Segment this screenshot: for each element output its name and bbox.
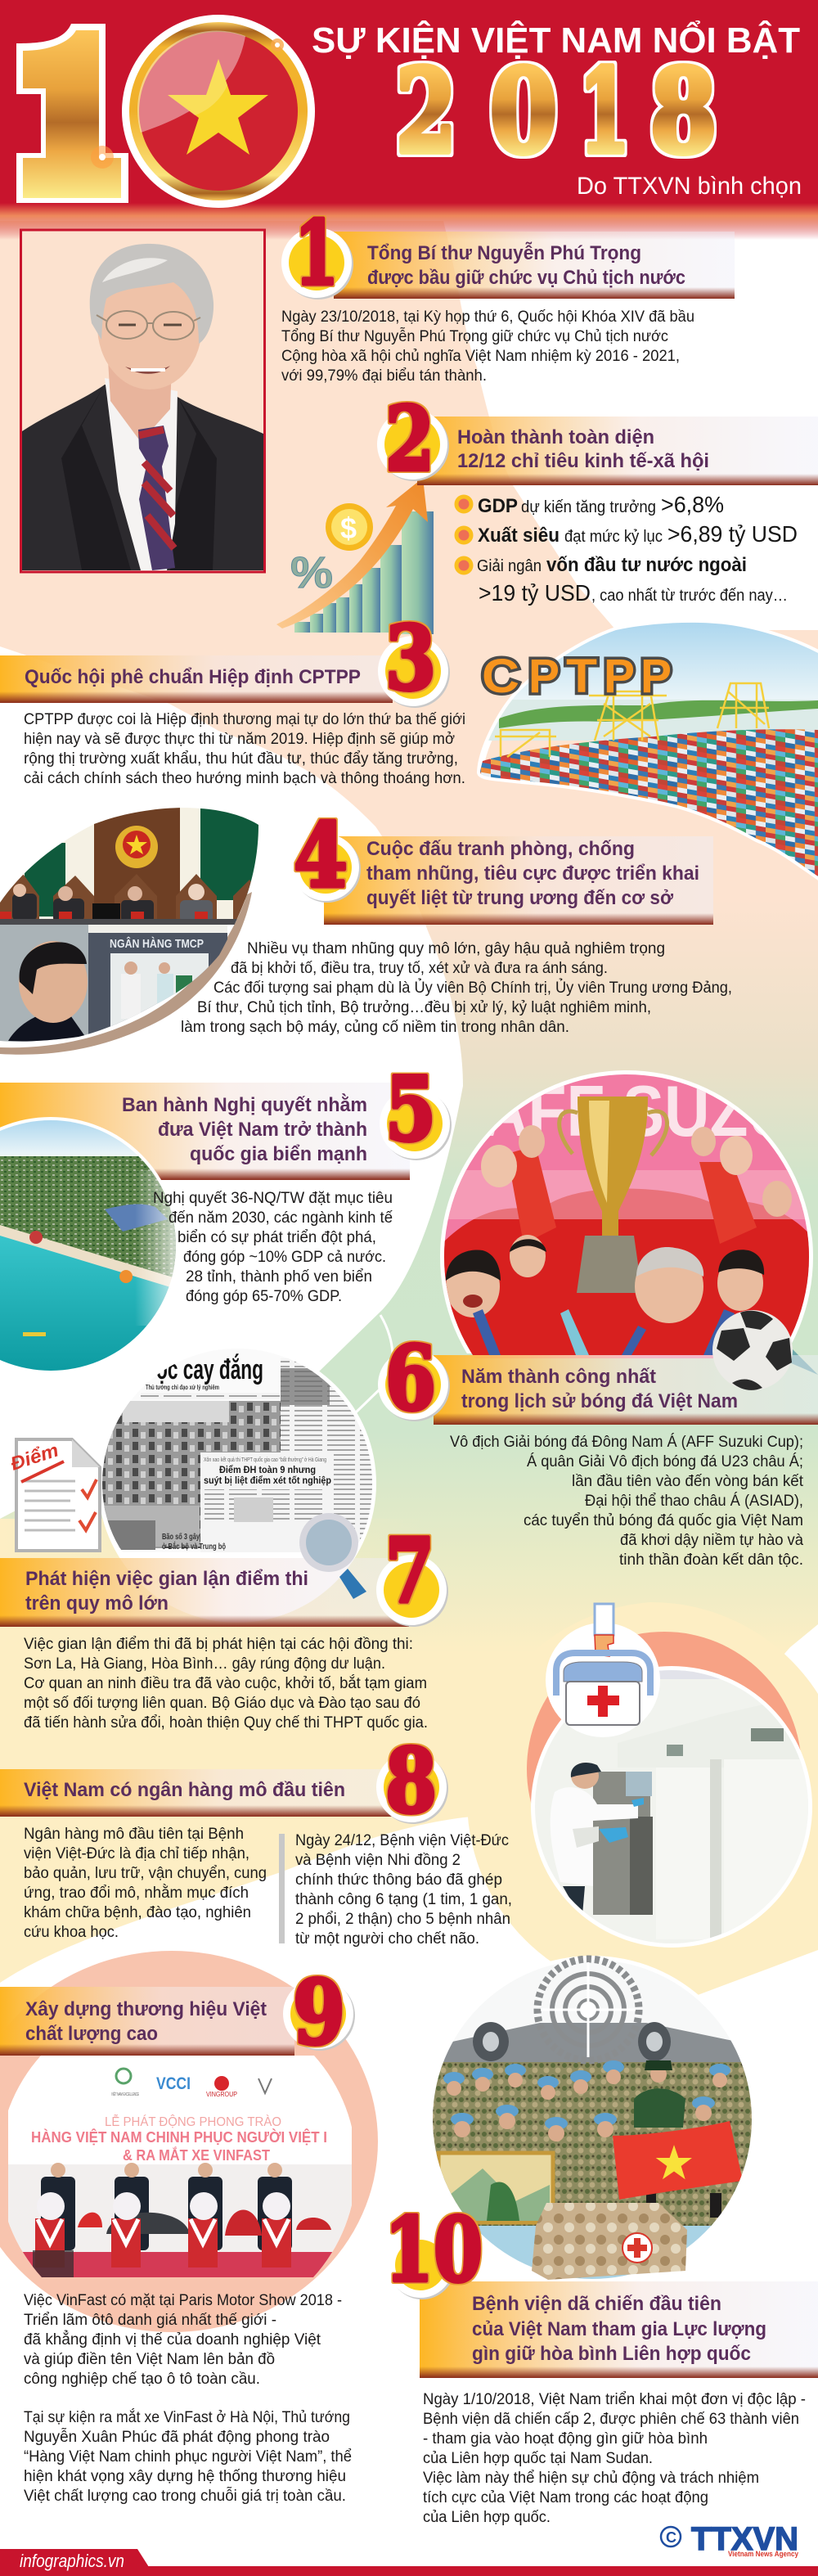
text: event 7: Cơ quan an ninh điều tra đã vào cuộc, khởi tố, bắt tạm giam [24, 1674, 427, 1692]
wordmark: CPTPP: P [640, 650, 672, 703]
text: event 10: - tham gia vào hoạt động gìn giữ hòa bình [423, 2430, 708, 2448]
background: flowing colour band [0, 221, 818, 1983]
bar: event 5 [0, 1083, 410, 1180]
bar: event 10 [420, 2281, 818, 2378]
text: event 6: Đại hội thể thao châu Á (ASIAD), [585, 1493, 803, 1510]
photo: VinFast launch event: & RA MẮT XE VINFAST [123, 2146, 270, 2164]
badge: number 7: 7 [385, 1520, 434, 1623]
text: event 7: Sơn La, Hà Giang, Hòa Bình… gây rúng động dư luận. [24, 1655, 385, 1673]
badge: number 6: 6 [385, 1327, 436, 1430]
text: event 6: các tuyển thủ bóng đá quốc gia Việt Nam [524, 1512, 803, 1529]
badge: number 3: 3 [385, 607, 436, 710]
text: event 6: tinh thần đoàn kết dân tộc. [619, 1551, 803, 1569]
text: event 8 left column: cứu khoa học. [24, 1924, 119, 1941]
text: event 3 [24, 711, 465, 787]
badge: number 4: 4 [294, 804, 348, 907]
text: event 8 right column [295, 1832, 512, 1948]
icon: UN emblem [537, 1959, 639, 2060]
icon: exam score sheet [8, 1439, 100, 1551]
list: economic indicators: GDP [478, 495, 518, 517]
heading: event 5: quốc gia biển mạnh [190, 1143, 367, 1165]
photo: VinFast launch event: VINGROUP [206, 2091, 237, 2098]
heading: event 10: Bệnh viện dã chiến đầu tiên [472, 2293, 721, 2315]
year 2018: 1 [579, 45, 630, 179]
icon: organ transport box [546, 1604, 660, 1737]
heading: event 9: Xây dựng thương hiệu Việt [25, 1998, 267, 2020]
text: event 8 right column: từ một người cho chết não. [295, 1930, 479, 1948]
salmon circle behind tissue bank photo [527, 1632, 802, 1907]
heading: event 5: Ban hành Nghị quyết nhằm [122, 1093, 367, 1116]
divider between columns [279, 1834, 285, 1943]
wordmark: CPTPP: T [566, 650, 597, 703]
list: economic indicators: Xuất siêu [478, 525, 560, 547]
list: economic indicators [456, 492, 798, 606]
text: event 7 [24, 1636, 428, 1732]
text: event 10: của Liên hợp quốc. [423, 2509, 551, 2526]
text: event 8 right column: 2 phổi, 2 thận) cho 5 bệnh nhân [295, 1911, 510, 1928]
bar: event 2 [417, 417, 818, 485]
logo: TTXVN: TTXVN [691, 2521, 798, 2557]
badge: number 2: 2 [385, 388, 434, 491]
text: event 4: Nhiều vụ tham nhũng quy mô lớn, gây hậu quả nghiêm trọng [247, 940, 665, 957]
heading: event 6: Năm thành công nhất [461, 1366, 656, 1388]
icon: exam score sheet: Điểm [8, 1439, 61, 1475]
wordmark: CPTPP: C [482, 650, 519, 703]
text: event 1 [281, 308, 694, 385]
photo: court and trial: NGÂN HÀNG TMCP [110, 936, 204, 951]
photo: coastal resort [0, 1117, 180, 1375]
icon: percent: % [290, 548, 333, 597]
list: economic indicators: >19 tỷ USD [479, 580, 591, 606]
list: economic indicators: >6,8% [661, 492, 724, 517]
text: event 1: Tổng Bí thư Nguyễn Phú Trọng giữ chức vụ Chủ tịch nước [281, 327, 668, 345]
footer strip: infographics.vn [20, 2551, 124, 2571]
text: event 6: đã khơi dậy niềm tự hào và [620, 1532, 803, 1549]
photo: newspaper collage: Xôn xao kết quả thi THPT quốc gia cao “bất thường” ở Hà Giang [204, 1456, 326, 1463]
heading: event 1: Tổng Bí thư Nguyễn Phú Trọng [367, 241, 641, 264]
wordmark: CPTPP [482, 650, 672, 703]
year 2018: 8 [650, 45, 717, 179]
badge: number 9: 9 [293, 1961, 345, 2065]
portrait photo [21, 230, 265, 572]
badge: number 10: 10 [384, 2199, 483, 2302]
text: event 3: CPTPP được coi là Hiệp định thương mại tự do lớn thứ ba thế giới [24, 711, 465, 728]
badge: number 1: 1 [294, 202, 339, 305]
icon: dollar coin: $ [340, 511, 357, 545]
bar: event 6 [434, 1355, 818, 1425]
text: event 9: Nguyễn Xuân Phúc đã phát động phong trào [24, 2428, 330, 2446]
text: event 5: đóng góp 65-70% GDP. [186, 1288, 342, 1305]
heading: event 2 [457, 426, 709, 472]
heading: event 10: gìn giữ hòa bình Liên hợp quốc [472, 2343, 751, 2365]
text: event 9: và giúp điền tên Việt Nam lên bản đồ [24, 2351, 275, 2368]
text: event 4: đã bị khởi tố, điều tra, truy tố, xét xử và đưa ra ánh sáng. [231, 960, 608, 977]
footer strip [0, 2549, 818, 2576]
photo: newspaper collage: Điểm ĐH toàn 9 nhưng [219, 1464, 316, 1475]
text: event 5 [153, 1190, 393, 1305]
heading: event 3: Quốc hội phê chuẩn Hiệp định CPTPP [25, 666, 361, 688]
text: event 1: Cộng hòa xã hội chủ nghĩa Việt Nam nhiệm kỳ 2016 - 2021, [281, 348, 680, 365]
text: event 8 left column: khám chữa bệnh, đào tạo, nghiên [24, 1904, 251, 1921]
heading: event 9: chất lượng cao [25, 2023, 158, 2045]
text: event 5: biển có sự phát triển đột phá, [178, 1229, 376, 1246]
text: event 10: Bệnh viện dã chiến cấp 2, được phiên chế 63 thành viên [423, 2411, 799, 2428]
text: event 7: Việc gian lận điểm thi đã bị phát hiện tại các hội đồng thi: [24, 1636, 413, 1653]
photo: court and trial [0, 806, 262, 1055]
photo: newspaper collage: Thủ tướng chỉ đạo xử lý nghiêm [146, 1384, 219, 1391]
text: event 10: Ngày 1/10/2018, Việt Nam triển khai một đơn vị độc lập - [423, 2391, 806, 2408]
text: event 8 left column: bảo quản, lưu trữ, vận chuyển, cung [24, 1865, 267, 1882]
photo: newspaper collage: Bão số 3 gây [162, 1532, 200, 1542]
photo: newspaper collage [98, 1344, 376, 1623]
text: event 4: Bí thư, Chủ tịch tỉnh, Bộ trưởng…đều bị xử lý, kỷ luật nghiêm minh, [197, 999, 651, 1016]
text: event 6: Vô địch Giải bóng đá Đông Nam Á (AFF Suzuki Cup); [450, 1434, 803, 1451]
wordmark: CPTPP: P [528, 650, 560, 703]
text: event 10: Việc làm này thể hiện sự chủ động và trách nhiệm [423, 2470, 759, 2487]
title: SỰ KIỆN VIỆT NAM NỔI BẬT [312, 19, 800, 61]
logo: TTXVN: Vietnam News Agency [728, 2550, 798, 2558]
text: event 8 right column: thành công 6 tạng (1 tim, 1 gan, [295, 1891, 512, 1908]
text: event 1: Ngày 23/10/2018, tại Kỳ họp thứ 6, Quốc hội Khóa XIV đã bầu [281, 308, 694, 326]
text: event 4: Các đối tượng sai phạm dù là Ủy viên Bộ Chính trị, Ủy viên Trung ương Đảng, [213, 979, 732, 997]
text: event 9: Việc VinFast có mặt tại Paris Motor Show 2018 - [24, 2292, 342, 2309]
photo: newspaper collage: ở Bắc bộ và Trung bộ [162, 1541, 226, 1551]
text: event 6: lần đầu tiên vào đến vòng bán kết [572, 1473, 804, 1490]
heading: event 7: Phát hiện việc gian lận điểm thi [25, 1568, 308, 1590]
wordmark: CPTPP: P [604, 650, 635, 703]
bar: event 8 [0, 1769, 401, 1817]
heading: event 5 [122, 1093, 367, 1165]
year 2018 [396, 45, 717, 179]
heading: event 9 [25, 1998, 267, 2045]
heading: event 5: đưa Việt Nam trở thành [158, 1119, 367, 1141]
text: event 9: Triển lãm ôtô danh giá nhất thế giới - [24, 2312, 276, 2329]
icon: ball motion tail [785, 1342, 818, 1375]
text: event 3: cải cách chính sách theo hướng minh bạch và thông thoáng hơn. [24, 770, 465, 787]
heading: event 4: Cuộc đấu tranh phòng, chống [366, 838, 635, 860]
photo: VinFast launch event: VIỆT NAM EXCELLENCE [111, 2091, 139, 2097]
photo: VinFast launch event: HÀNG VIỆT NAM CHINH PHỤC NGƯỜI VIỆT I [31, 2128, 327, 2146]
badge: number 8: 8 [385, 1730, 437, 1833]
heading: event 10 [472, 2293, 766, 2365]
header band [0, 0, 818, 240]
big gold numeral one [16, 24, 128, 203]
photo: newspaper collage: ọc cay đắng [156, 1354, 263, 1385]
icon: dollar coin [326, 503, 373, 551]
list: economic indicators: >6,89 tỷ USD [667, 521, 798, 547]
text: event 4: làm trong sạch bộ máy, củng cố niềm tin trong nhân dân. [181, 1019, 569, 1036]
text: event 10 [423, 2391, 806, 2526]
text: event 8 left column: viện Việt-Đức là địa chỉ tiếp nhận, [24, 1845, 249, 1862]
heading: event 2: Hoàn thành toàn diện [457, 426, 654, 448]
bar: event 9 [0, 1987, 294, 2056]
heading: event 2: 12/12 chỉ tiêu kinh tế-xã hội [457, 450, 709, 472]
text: event 8 right column: và Bệnh viện Nhi đồng 2 [295, 1852, 461, 1869]
heading: event 4 [366, 838, 699, 909]
photo: football team with trophy [440, 1070, 813, 1358]
heading: event 10: của Việt Nam tham gia Lực lượng [472, 2318, 766, 2340]
list: economic indicators: đạt mức kỷ lục [564, 528, 663, 546]
list: economic indicators: vốn đầu tư nước ngoài [546, 554, 747, 576]
text: event 9: đã khẳng định vị thế của doanh nghiệp Việt [24, 2331, 321, 2349]
badge: number 5: 5 [385, 1058, 436, 1161]
text: event 5: đóng góp ~10% GDP cả nước. [183, 1249, 386, 1266]
heading: event 6 [461, 1366, 738, 1412]
list: economic indicators: , cao nhất từ trước đến nay… [591, 587, 788, 605]
icon: football [712, 1310, 793, 1390]
photo: VinFast launch event [8, 2056, 352, 2277]
text: event 8 right column: chính thức thông báo đã ghép [295, 1871, 502, 1889]
text: event 5: 28 tỉnh, thành phố ven biển [186, 1268, 372, 1286]
text: event 9 [24, 2292, 352, 2505]
background: white arc [355, 1315, 393, 1413]
text: event 7: một số đối tượng liên quan. Bộ Giáo dục và Đào tạo sau đó [24, 1695, 420, 1712]
text: event 5: Nghị quyết 36-NQ/TW đặt mục tiêu [153, 1190, 393, 1207]
photo: VinFast launch event: VCCI [156, 2074, 191, 2093]
pink circle behind event 9 [0, 1951, 378, 2332]
logo: TTXVN: C [666, 2529, 676, 2546]
bar: event 7 [0, 1558, 409, 1627]
heading: event 1 [367, 241, 685, 289]
text: event 7: đã tiến hành sửa đổi, hoàn thiện Quy chế thi THPT quốc gia. [24, 1714, 428, 1732]
text: event 5: đến năm 2030, các ngành kinh tế [169, 1209, 393, 1227]
photo: VinFast launch event: LỄ PHÁT ĐỘNG PHONG TRÀO [105, 2114, 281, 2129]
text: event 8 left column [24, 1826, 267, 1941]
subtitle: Do TTXVN bình chọn [577, 173, 802, 200]
text: event 9: hiện khát vọng xây dựng hệ thống thương hiệu [24, 2468, 346, 2485]
text: event 9: công nghiệp chế tạo ô tô toàn cầu. [24, 2371, 260, 2388]
medallion with star [122, 15, 315, 208]
heading: event 7: trên quy mô lớn [25, 1592, 169, 1615]
text: event 9: Việt chất lượng cao trong chuỗi giá trị toàn cầu. [24, 2487, 346, 2505]
text: event 6: Á quân Giải Vô địch bóng đá U23 châu Á; [527, 1453, 803, 1470]
text: event 4 [181, 940, 732, 1036]
heading: event 4: quyết liệt từ trung ương đến cơ sở [366, 887, 674, 909]
text: event 8 right column: Ngày 24/12, Bệnh viện Việt-Đức [295, 1832, 509, 1849]
text: event 9: Tại sự kiện ra mắt xe VinFast ở Hà Nội, Thủ tướng [24, 2408, 350, 2426]
heading: event 4: tham nhũng, tiêu cực được triển khai [366, 862, 699, 885]
text: event 1: với 99,79% đại biểu tán thành. [281, 367, 487, 385]
photo: tissue bank [531, 1666, 814, 1948]
chart: growth bars with arrow [276, 478, 434, 634]
text: event 9: “Hàng Việt Nam chinh phục người Việt Nam”, thể [24, 2448, 352, 2466]
heading: event 7 [25, 1568, 308, 1615]
year 2018: 0 [490, 45, 557, 179]
background: cream circle [467, 1602, 818, 1997]
photo: newspaper collage: suýt bị liệt điểm xét tốt nghiệp [204, 1475, 331, 1486]
list: economic indicators: Giải ngân [477, 557, 542, 575]
text: event 10: tích cực của Việt Nam trong các hoạt động [423, 2489, 708, 2506]
bar: event 3 [0, 655, 393, 703]
text: event 8 left column: Ngân hàng mô đầu tiên tại Bệnh [24, 1826, 244, 1843]
heading: event 6: trong lịch sử bóng đá Việt Nam [461, 1390, 738, 1412]
bar: event 1 [334, 232, 735, 299]
text: event 8 left column: ứng, trao đổi mô, nhằm mục đích [24, 1884, 249, 1902]
icon: magnifying glass [299, 1513, 366, 1599]
text: event 3: hiện nay và sẽ được thực thi từ năm 2019. Hiệp định sẽ giúp mở [24, 731, 455, 748]
year 2018: 2 [396, 45, 456, 179]
text: event 6 [450, 1434, 804, 1569]
list: economic indicators: dự kiến tăng trưởng [521, 498, 656, 516]
text: event 10: của Liên hợp quốc tại Nam Sudan. [423, 2450, 653, 2467]
heading: event 1: được bầu giữ chức vụ Chủ tịch nước [367, 267, 685, 289]
background: cream fade left [0, 1519, 425, 1682]
heading: event 8: Việt Nam có ngân hàng mô đầu tiên [24, 1779, 345, 1801]
text: event 3: rộng thị trường xuất khẩu, thu hút đầu tư, thúc đẩy tăng trưởng, [24, 750, 458, 768]
photo: container port [474, 618, 818, 880]
photo: UN peacekeepers [425, 1956, 761, 2283]
bar: event 4 [324, 836, 713, 925]
